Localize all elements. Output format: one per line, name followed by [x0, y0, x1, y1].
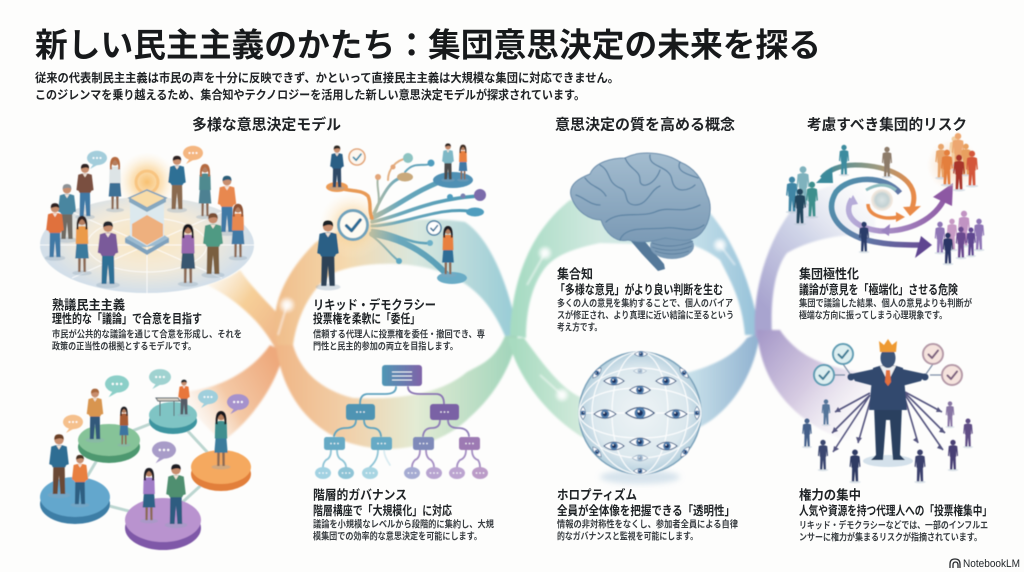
inner swirl: [866, 185, 905, 222]
vote arrows: [832, 392, 945, 452]
illustration: hierarchy tree: [315, 365, 488, 479]
text block: group polarization: 議論が意見を「極端化」させる危険: [799, 282, 958, 297]
text block: holoptism: 全員が全体像を把握できる「透明性」: [557, 503, 735, 518]
text block: hierarchical governance: 階層構座で「大規模化」に対応: [313, 503, 452, 518]
logo icon: [950, 559, 960, 568]
glow: [319, 191, 387, 259]
root node: [382, 365, 422, 386]
plaza disc: [40, 197, 254, 293]
speech bubbles: [87, 151, 107, 169]
text block: hierarchical governance: [313, 488, 494, 542]
cerebrum: [571, 153, 710, 242]
intro text: [35, 70, 619, 102]
text block: holoptism: ホロプティズム: [557, 488, 637, 502]
text block: power concentration: リキッド・デモクラシーなどでは、一部のインフルエ: [799, 520, 988, 532]
connecting links: [75, 415, 221, 520]
brain stem: [630, 238, 665, 271]
icon: brain: [571, 153, 710, 271]
text block: deliberative democracy: 熟議民主主義: [52, 298, 125, 312]
ribbon: orange lower left from crossing: [175, 345, 284, 442]
text block: collective intelligence: [555, 266, 734, 334]
third arc arrow: [847, 183, 953, 236]
pedestal: [125, 190, 169, 255]
text block: group polarization: 集団極性化: [799, 266, 859, 282]
glow: [117, 152, 177, 212]
text block: group polarization: 極端な方向に振ってしまう心理現象です。: [799, 310, 947, 322]
logo: NotebookLM: NotebookLM: [963, 558, 1020, 570]
orange group: [927, 133, 979, 191]
text block: liquid democracy: [313, 298, 485, 352]
eyes: [580, 352, 700, 474]
delegates: [316, 143, 469, 290]
crown: [879, 339, 897, 352]
flow streams: [338, 158, 478, 278]
ribbon: upper arch around liquid democracy: [275, 219, 518, 345]
ribbon: arch behind sphere: [508, 332, 760, 437]
desk: [156, 398, 180, 416]
title: 新しい民主主義のかたち：集団意思決定の未来を探る: [35, 26, 821, 64]
check badges: [338, 149, 441, 240]
cerebellum: [650, 233, 694, 259]
connectors: [323, 387, 480, 467]
intro text: 従来の代表制民主主義は市民の声を十分に反映できず、かといって直接民主主義は大規模な集団に対応できません。: [35, 70, 619, 85]
shadow: [863, 455, 913, 467]
leaf bubbles: [315, 467, 488, 479]
discs: [40, 402, 251, 550]
illustration: stakeholder disc network: [40, 369, 251, 550]
ribbon: purple arch to risk: [755, 180, 875, 350]
text block: group polarization: [799, 266, 972, 322]
cerebral folds: [576, 155, 704, 240]
people on spiral: [839, 145, 892, 253]
speech bubbles: [63, 369, 249, 463]
crowd: [802, 399, 973, 483]
circle of citizens: [45, 156, 247, 288]
icon: transparency sphere: [579, 352, 701, 484]
text block: liquid democracy: 信頼する代理人に投票権を委任・撤回でき、専: [313, 328, 485, 340]
ribbon: purple lower arch: [757, 330, 880, 442]
text block: deliberative democracy: 政策の正当性の根拠とするモデルです。: [52, 340, 196, 352]
text block: hierarchical governance: 議論を小規模なレベルから段階的に集約し、大規: [313, 518, 494, 530]
purple group: [934, 211, 984, 265]
text block: liquid democracy: 門性と民主的参加の両立を目指します。: [313, 340, 458, 352]
ribbon: lower arch around hierarchy: [276, 335, 518, 449]
text block: collective intelligence: 多くの人の意見を集約することで、個人のバイア: [557, 298, 733, 310]
network nodes: [326, 153, 486, 284]
text block: power concentration: 権力の集中: [799, 488, 861, 502]
flowing ribbons: [175, 180, 880, 449]
text block: liquid democracy: リキッド・デモクラシー: [313, 298, 436, 312]
ribbon: orange upper left to crossing: [205, 270, 290, 350]
icon: spiral polarization: [786, 133, 984, 265]
ribbon: arch behind brain: [510, 200, 760, 338]
heading: models: 多様な意思決定モデル: [192, 116, 341, 134]
heading: risks: 考慮すべき集団的リスク: [807, 116, 967, 134]
text block: deliberative democracy: 市民が公共的な議論を通じて合意を形成し、それを: [52, 328, 242, 340]
text block: hierarchical governance: 模集団での効率的な意思決定を可能にします。: [313, 530, 482, 542]
text block: group polarization: 集団で議論した結果、個人の意見よりも判断が: [799, 298, 972, 310]
meridians: [579, 352, 701, 474]
ribbon highlights: [278, 237, 735, 403]
second arc arrow: [832, 179, 932, 258]
illustration: deliberative plaza: [40, 146, 254, 293]
text block: collective intelligence: 「多様な意見」がより良い判断を生む: [555, 282, 723, 297]
heading: concepts: 意思決定の質を高める概念: [555, 116, 735, 134]
level 3 nodes: [324, 437, 480, 450]
ballot badges: [814, 344, 962, 385]
text block: collective intelligence: 考え方です。: [557, 322, 602, 334]
leader figure: [848, 348, 928, 460]
glass ball: [579, 352, 701, 474]
outer arc arrow: [816, 165, 921, 216]
illustration: liquid democracy network: [316, 143, 486, 290]
text block: hierarchical governance: 階層的ガバナンス: [313, 488, 407, 502]
level 2 nodes: [346, 404, 459, 420]
shadow: [600, 470, 680, 484]
people on discs: [48, 380, 231, 528]
text block: collective intelligence: 集合知: [557, 266, 593, 282]
text block: power concentration: ンサーに権力が集まるリスクが指摘されています。: [799, 532, 982, 544]
teal group: [786, 166, 818, 225]
text block: holoptism: 的なガバナンスと監視を可能にします。: [557, 530, 698, 542]
text block: liquid democracy: 投票権を柔軟に「委任」: [313, 311, 420, 326]
icon: power concentration: [802, 339, 973, 483]
text block: deliberative democracy: 理性的な「議論」で合意を目指す: [52, 311, 202, 326]
text block: holoptism: 情報の非対称性をなくし、参加者全員による自律: [557, 518, 738, 530]
arrow heads: [832, 407, 945, 452]
text block: deliberative democracy: [52, 298, 242, 352]
text block: holoptism: [557, 488, 738, 542]
text block: power concentration: [799, 488, 992, 544]
intro text: このジレンマを乗り越えるため、集合知やテクノロジーを活用した新しい意思決定モデルが探求されています。: [35, 87, 585, 102]
text block: collective intelligence: スが修正され、より真理に近い結論に至るという: [557, 310, 734, 322]
